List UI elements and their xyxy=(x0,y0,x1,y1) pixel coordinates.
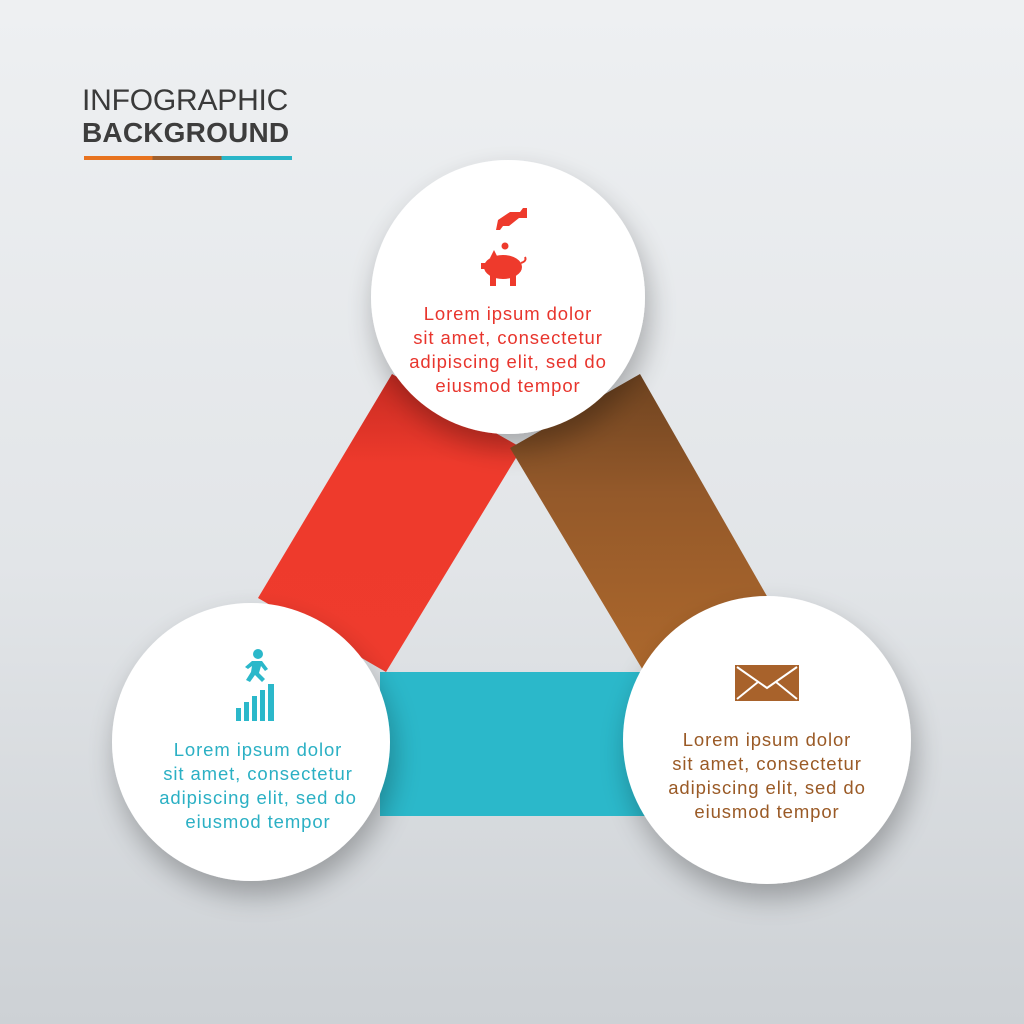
text: right: sit amet, consectetur xyxy=(672,753,862,774)
text: top: Lorem ipsum dolor xyxy=(424,303,592,324)
band: cyan bottom xyxy=(380,672,650,816)
text: right xyxy=(668,729,866,822)
text: right: Lorem ipsum dolor xyxy=(683,729,851,750)
text: right: eiusmod tempor xyxy=(694,801,840,822)
icon: hand and piggy bank xyxy=(481,208,527,286)
circle: right xyxy=(623,596,911,884)
text: top: sit amet, consectetur xyxy=(413,327,603,348)
band: red left xyxy=(258,374,522,672)
icon: envelope xyxy=(735,665,799,701)
title: INFOGRAPHIC xyxy=(82,84,288,117)
text: top: eiusmod tempor xyxy=(435,375,581,396)
circle: left xyxy=(112,603,390,881)
text: top: adipiscing elit, sed do xyxy=(409,351,607,372)
text: left: Lorem ipsum dolor xyxy=(174,739,342,760)
text: right: adipiscing elit, sed do xyxy=(668,777,866,798)
text: top xyxy=(409,303,607,396)
band: brown right xyxy=(510,374,768,672)
icon: runner on stairs xyxy=(236,649,274,721)
text: left: eiusmod tempor xyxy=(185,811,331,832)
text: left xyxy=(159,739,357,832)
text: left: sit amet, consectetur xyxy=(163,763,353,784)
title: BACKGROUND xyxy=(82,117,289,148)
title xyxy=(82,84,292,160)
circle: top xyxy=(371,160,645,434)
text: left: adipiscing elit, sed do xyxy=(159,787,357,808)
